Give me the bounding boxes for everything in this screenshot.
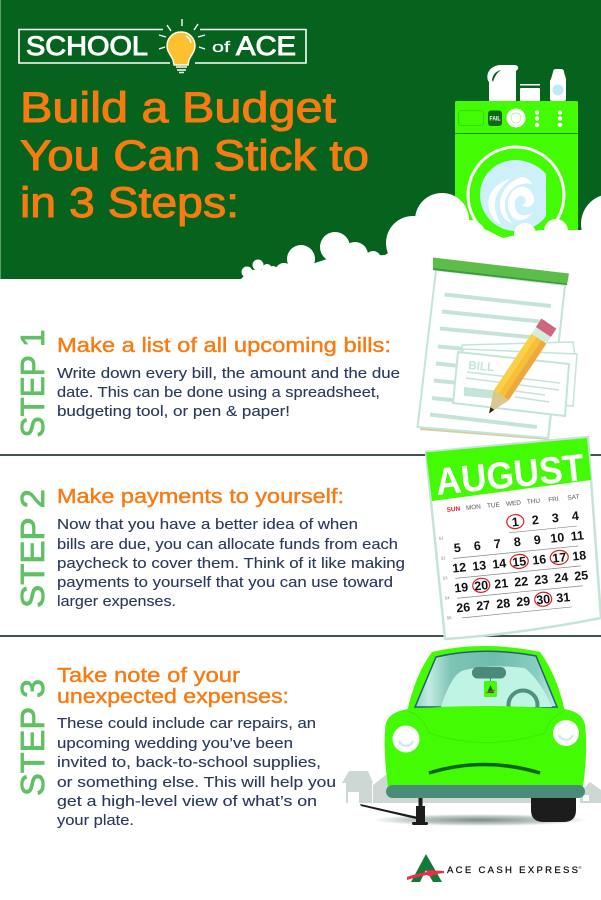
icon: light bulb — [159, 19, 205, 72]
panel: step 3 — [14, 665, 336, 829]
week numbers: 54 — [445, 595, 450, 600]
weekday labels: SAT — [567, 494, 580, 502]
dates: 29 — [516, 594, 531, 609]
weekday labels: TUE — [487, 502, 500, 510]
step 3 text — [57, 716, 336, 829]
step 2 text — [57, 517, 405, 610]
divider lines — [0, 454, 601, 637]
step 3 text: get a high-level view of what’s on — [57, 794, 317, 810]
panel: step 1 — [14, 330, 400, 438]
illustration: bills notepad and pencil — [418, 258, 577, 440]
registered mark: ® — [578, 865, 582, 870]
calendar grid — [436, 494, 591, 620]
calendar page — [426, 437, 601, 639]
left headlight — [392, 726, 420, 752]
air freshener — [484, 678, 497, 697]
title — [20, 84, 369, 227]
week numbers: 51 — [439, 535, 444, 541]
step 2 text: Now that you have a better idea of when — [57, 517, 358, 533]
dates: 22 — [514, 574, 529, 589]
dates: 14 — [492, 556, 507, 572]
title: You Can Stick to — [20, 132, 369, 180]
logo word: ACE: ACE — [236, 31, 296, 61]
step 3 heading — [57, 665, 289, 708]
logo word: SCHOOL: SCHOOL — [26, 31, 148, 61]
illustration: broken-down car — [342, 646, 601, 826]
dates: 21 — [494, 576, 509, 591]
step 1 text — [57, 366, 400, 420]
washer fail button — [488, 110, 502, 126]
dates: 1 — [511, 515, 520, 529]
step 2 text: payments to yourself that you can use toward — [57, 575, 393, 591]
step 1 text: Write down every bill, the amount and the due — [57, 366, 400, 382]
weekday labels: THU — [527, 498, 541, 506]
step 2 heading: Make payments to yourself: — [57, 486, 344, 508]
step 1 label: STEP 1 — [14, 330, 51, 438]
dates: 20 — [474, 578, 489, 593]
dates: 27 — [476, 598, 491, 613]
step 3 heading: unexpected expenses: — [57, 686, 289, 708]
panel: step 2 — [14, 486, 405, 610]
bumper — [386, 785, 585, 798]
step 3 heading: Take note of your — [57, 665, 240, 687]
icon: detergent bottles — [487, 65, 566, 101]
title: Build a Budget — [20, 84, 336, 132]
step 1 heading: Make a list of all upcoming bills: — [57, 335, 391, 357]
jack — [360, 798, 428, 825]
dates — [448, 508, 591, 615]
tire — [531, 795, 576, 822]
dates: 31 — [556, 590, 571, 605]
icon: jug — [487, 65, 518, 101]
calendar header — [426, 438, 591, 501]
week numbers — [439, 535, 452, 620]
car body — [385, 706, 586, 787]
clouds of soap foam — [241, 193, 601, 282]
weekday labels: SUN — [446, 506, 461, 514]
washer fail button: FAIL — [490, 116, 501, 122]
step 3 text: your plate. — [57, 813, 134, 829]
step 3 text: or something else. This will help you — [57, 775, 336, 791]
dates: 3 — [551, 511, 560, 525]
dates: 10 — [550, 530, 565, 546]
illustration: August calendar — [426, 437, 601, 639]
logo: School of Ace — [19, 19, 306, 72]
dates: 15 — [512, 554, 527, 570]
week numbers: 52 — [441, 555, 446, 561]
dates: 9 — [533, 533, 542, 547]
car roof — [407, 646, 565, 712]
weekday labels: WED — [506, 499, 522, 508]
icon: box — [520, 84, 540, 101]
weekday labels: MON — [466, 503, 482, 512]
notepad — [418, 258, 569, 440]
panel: green header — [0, 0, 601, 279]
washer swirl — [488, 177, 534, 225]
step 3 text: These could include car repairs, an — [57, 716, 316, 732]
step 2 text: paycheck to cover them. Think of it like making — [57, 556, 405, 572]
right headlight — [553, 720, 579, 746]
dates: 25 — [574, 568, 589, 584]
dates: 17 — [552, 550, 567, 566]
step 2 text: bills are due, you can allocate funds from each — [57, 537, 398, 553]
step 1 text: date. This can be done using a spreadsheet, — [57, 385, 380, 401]
dates: 16 — [532, 552, 547, 568]
step 2 text: larger expenses. — [57, 594, 176, 610]
logo word: of: of — [212, 39, 231, 56]
week numbers: 55 — [447, 615, 452, 620]
logo wordmark: ACE CASH EXPRESS — [447, 865, 578, 876]
weekday labels — [446, 494, 580, 514]
title: in 3 Steps: — [20, 179, 239, 227]
bills — [453, 342, 577, 416]
icon: bottle — [550, 69, 566, 101]
rear-view mirror — [472, 667, 506, 678]
step 1 text: budgeting tool, or pen & paper! — [57, 404, 290, 420]
frown — [429, 764, 540, 773]
dates: 23 — [534, 572, 549, 587]
dates: 4 — [571, 509, 580, 523]
dates: 19 — [454, 580, 469, 595]
dates: 28 — [496, 596, 511, 611]
step 3 label: STEP 3 — [14, 679, 51, 796]
dates: 8 — [513, 535, 522, 549]
dates: 5 — [453, 541, 462, 555]
dates: 2 — [531, 513, 540, 527]
logo mark — [407, 854, 444, 882]
step 3 text: upcoming wedding you’ve been — [57, 736, 293, 752]
week numbers: 53 — [443, 575, 448, 581]
dates: 11 — [570, 528, 585, 544]
dates: 26 — [456, 600, 471, 615]
dates: 30 — [536, 592, 551, 607]
logo: Ace Cash Express — [407, 854, 582, 882]
windshield — [414, 650, 558, 708]
pencil — [482, 319, 556, 418]
dates: 6 — [473, 539, 482, 553]
dates: 7 — [493, 537, 502, 551]
dates: 18 — [572, 548, 587, 564]
illustration: washing machine — [455, 101, 578, 251]
background houses — [342, 771, 601, 803]
weekday labels: FRI — [548, 496, 559, 504]
dates: 13 — [472, 558, 487, 574]
dates: 24 — [554, 570, 569, 585]
step 3 text: invited to, back-to-school supplies, — [57, 755, 321, 771]
calendar month: AUGUST — [434, 447, 586, 504]
red date circles — [466, 510, 573, 613]
ground shadow — [372, 814, 588, 826]
bill word: BILL — [468, 358, 495, 374]
step 2 label: STEP 2 — [14, 489, 51, 608]
dates: 12 — [452, 560, 467, 576]
